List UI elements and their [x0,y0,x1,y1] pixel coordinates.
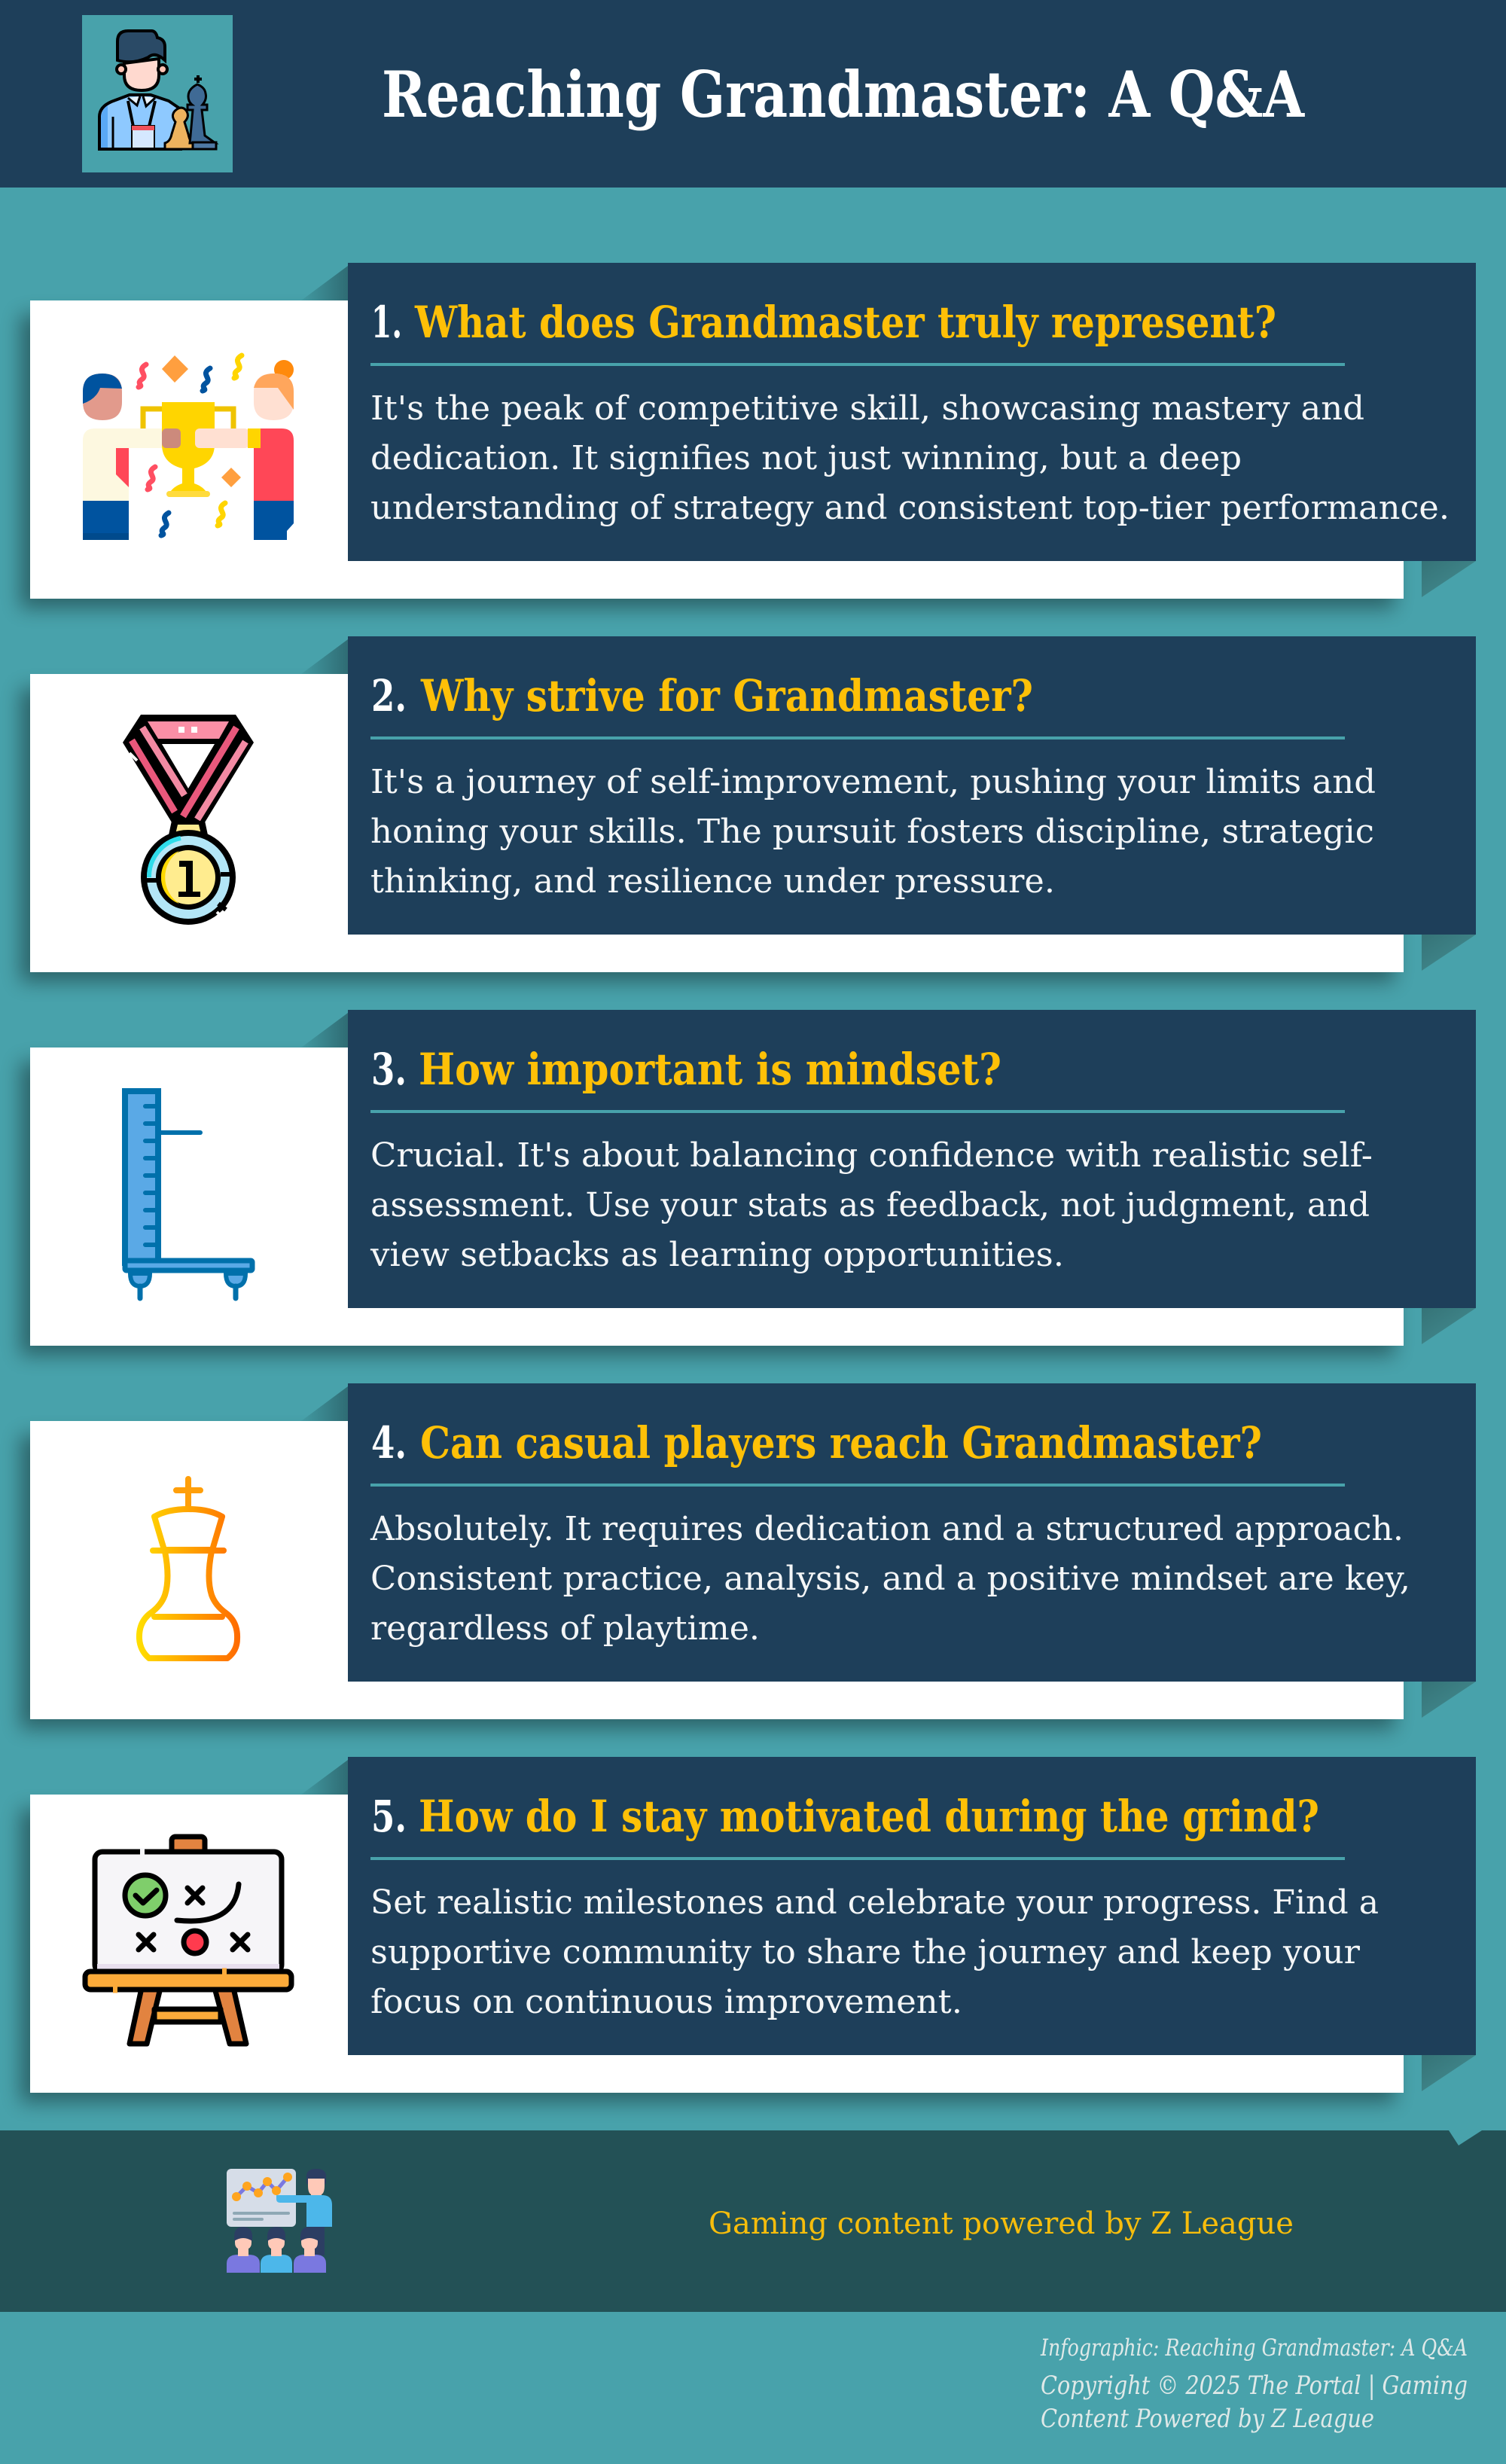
answer text 1 [370,389,1450,527]
answer text 5: supportive community to share the journey and keep your [370,1933,1361,1972]
answer text 3: view setbacks as learning opportunities. [370,1236,1064,1274]
panel: question 4 [20,1383,1476,1729]
title: Reaching Grandmaster: A Q&A [382,57,1306,132]
answer text 4: regardless of playtime. [370,1609,760,1648]
answer text 1: understanding of strategy and consistent top-tier performance. [370,489,1450,527]
answer text 3: assessment. Use your stats as feedback, not judgment, and [370,1186,1370,1224]
answer text 3 [370,1136,1373,1274]
credits [1040,2334,1468,2434]
panel: question 5 [20,1757,1476,2103]
sponsor line: Gaming content powered by Z League [709,2206,1294,2241]
answer text 4: Consistent practice, analysis, and a positive mindset are key, [370,1560,1410,1598]
question heading 4: 4. [371,1417,407,1468]
question heading 1: 1. [371,297,402,348]
panel: question 3 [20,1010,1476,1356]
icon: two players holding trophy [83,355,294,540]
question heading 3: How important is mindset? [419,1044,1001,1095]
question heading 2: Why strive for Grandmaster? [420,670,1033,721]
answer text 4: Absolutely. It requires dedication and a structured approach. [370,1510,1404,1548]
icon: grandmaster with chess pieces [82,15,233,172]
answer text 5: Set realistic milestones and celebrate your progress. Find a [370,1883,1379,1922]
icon: chess king outline [139,1479,237,1658]
question heading 3: 3. [371,1044,407,1095]
header band [0,0,1506,188]
icon: presenter with audience [227,2169,332,2273]
icon: gold medal [123,715,254,925]
answer text 5: focus on continuous improvement. [370,1983,962,2021]
answer text 4 [370,1510,1410,1648]
answer text 2: thinking, and resilience under pressure. [370,862,1055,901]
icon: measuring stand [125,1091,252,1298]
question heading 5: How do I stay motivated during the grind? [419,1791,1319,1842]
footer band [0,2130,1506,2312]
question heading 4: Can casual players reach Grandmaster? [420,1417,1262,1468]
answer text 3: Crucial. It's about balancing confidence with realistic self- [370,1136,1373,1175]
question heading 2: 2. [371,670,407,721]
answer text 2 [370,763,1376,901]
answer text 1: It's the peak of competitive skill, showcasing mastery and [370,389,1364,428]
panel: question 2 [20,636,1476,982]
answer text 5 [370,1883,1379,2021]
answer text 2: It's a journey of self-improvement, pushing your limits and [370,763,1376,801]
panel: question 1 [20,263,1476,608]
icon: strategy board on easel [85,1837,291,2044]
answer text 1: dedication. It signifies not just winning, but a deep [370,439,1242,477]
credits: Content Powered by Z League [1041,2404,1374,2434]
answer text 2: honing your skills. The pursuit fosters discipline, strategic [370,813,1374,851]
question heading 5: 5. [371,1791,407,1842]
question heading 1: What does Grandmaster truly represent? [414,297,1276,348]
